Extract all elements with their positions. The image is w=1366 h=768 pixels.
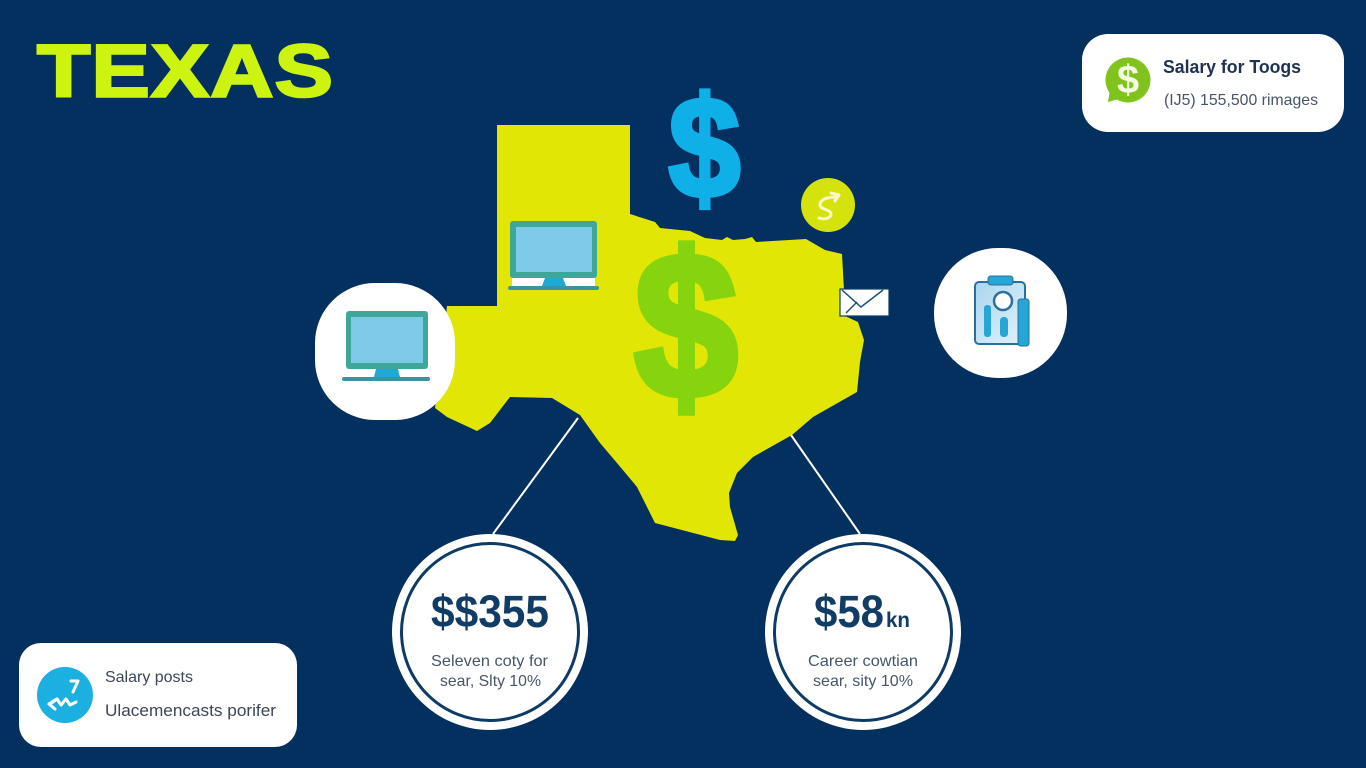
stat value: $58 bbox=[814, 586, 884, 637]
stat value: kn bbox=[886, 609, 910, 632]
icon: blue dollar: $ bbox=[669, 68, 740, 227]
panel: salary posts card bbox=[19, 643, 297, 747]
connector line: left bbox=[493, 418, 578, 534]
card heading: Salary posts bbox=[105, 669, 193, 686]
icon: small yellow coin bbox=[801, 178, 855, 232]
card detail: Ulacemencasts porifer bbox=[105, 701, 276, 720]
card heading: Salary for Toogs bbox=[1163, 57, 1301, 77]
icon: clipboard chart bbox=[975, 276, 1029, 346]
stat circle: left bbox=[392, 534, 588, 730]
panel: monitor badge bbox=[315, 283, 455, 420]
stat description: Career cowtian bbox=[808, 653, 918, 670]
stat description bbox=[808, 653, 918, 690]
card detail: (IJ5) 155,500 rimages bbox=[1164, 92, 1318, 109]
connector line: right bbox=[791, 435, 860, 534]
stat description: Seleven coty for bbox=[431, 653, 549, 670]
map: Texas bbox=[435, 125, 864, 541]
panel: clipboard badge bbox=[934, 248, 1067, 378]
title: TEXAS bbox=[37, 31, 334, 113]
icon: blue arrows bbox=[37, 667, 93, 723]
stat description: sear, sity 10% bbox=[813, 673, 913, 690]
icon: envelope bbox=[840, 289, 889, 316]
stat description: sear, Slty 10% bbox=[440, 673, 541, 690]
stat circle: right bbox=[765, 534, 961, 730]
stat value: $$355 bbox=[431, 586, 549, 637]
icon: monitor bbox=[342, 311, 430, 381]
stat description bbox=[431, 653, 549, 690]
panel: salary card bbox=[1082, 34, 1344, 132]
icon: green dollar bubble bbox=[1106, 58, 1150, 102]
icon: green dollar bubble: $ bbox=[1117, 58, 1139, 102]
icon: large green dollar: $ bbox=[635, 211, 737, 441]
icon: monitor on map bbox=[508, 221, 599, 290]
